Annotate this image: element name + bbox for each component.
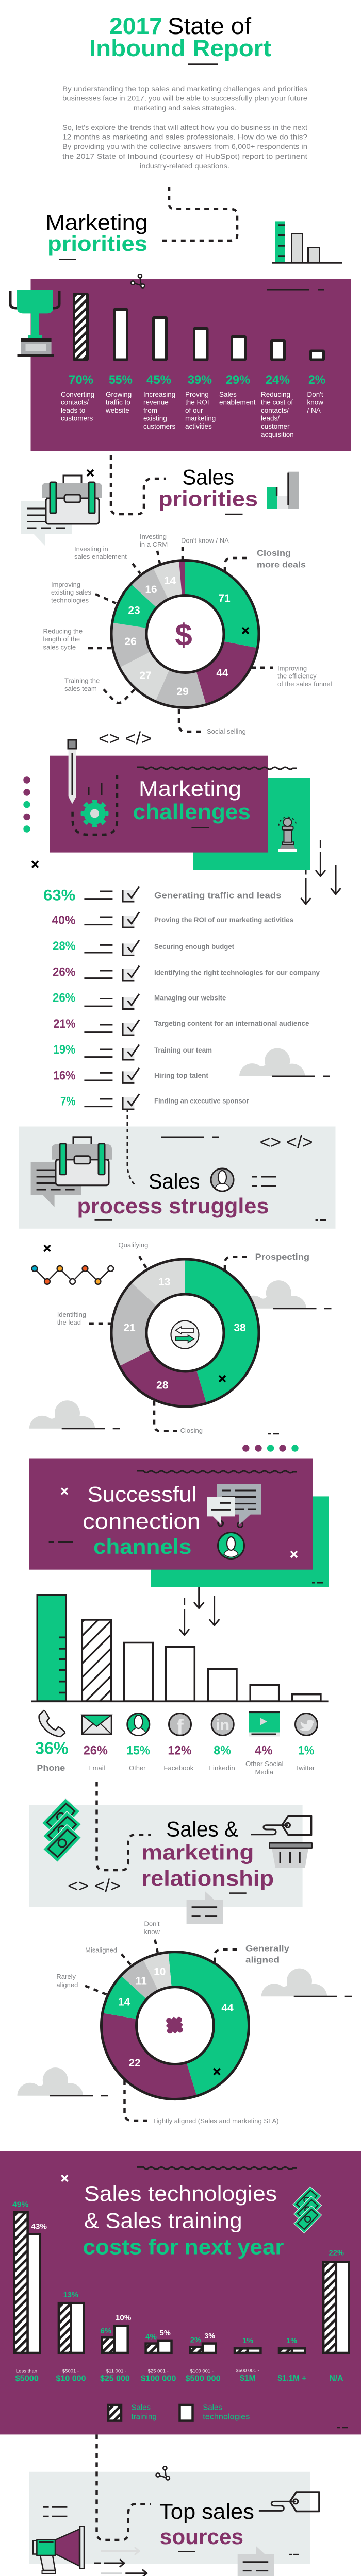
channel values and labels: Phone bbox=[37, 1763, 65, 1773]
donut chart: alignment: 11 bbox=[136, 1975, 147, 1987]
heading: top sales sources: Top sales bbox=[159, 2499, 254, 2523]
intro text: the 2017 State of Inbound (courtesy of HubSpot) report to pertinent bbox=[62, 152, 307, 160]
row 21%: Targeting content for an international audience bbox=[154, 1019, 309, 1027]
row 26%: Identifying the right technologies for our company bbox=[154, 969, 320, 977]
priority labels bbox=[61, 391, 323, 438]
channel values and labels: 15% bbox=[127, 1744, 150, 1758]
axis labels: $1.1M + bbox=[277, 2374, 306, 2383]
row 26% bbox=[53, 965, 320, 981]
axis labels: $5000 bbox=[15, 2375, 39, 2383]
axis labels: $10 000 bbox=[56, 2375, 86, 2383]
bars bbox=[74, 294, 324, 360]
icon: small bar chart bbox=[272, 221, 342, 263]
intro text: By understanding the top sales and marketing challenges and priorities bbox=[62, 84, 307, 93]
donut labels: alignment bbox=[56, 1920, 290, 2125]
panel: sales technologies and training costs: costs for next year bbox=[83, 2234, 284, 2259]
icon: facebook bbox=[169, 1714, 191, 1738]
priority labels: contacts/ bbox=[61, 399, 89, 406]
percent values: 55% bbox=[109, 373, 133, 387]
list: marketing challenges bbox=[43, 886, 320, 1109]
donut labels: sales priorities: Improving bbox=[51, 581, 80, 588]
percent values: 39% bbox=[188, 373, 212, 387]
priority labels: Converting bbox=[61, 391, 94, 398]
priority labels: the ROI bbox=[185, 399, 209, 406]
heading: marketing priorities: Marketing bbox=[45, 210, 148, 234]
heading: marketing priorities: priorities bbox=[47, 231, 147, 256]
axis labels: Less than bbox=[16, 2369, 37, 2375]
channel values and labels: Twitter bbox=[295, 1764, 315, 1772]
panel: top sales sources: sources bbox=[160, 2524, 243, 2549]
row 21%: 21% bbox=[54, 1017, 75, 1031]
row 16%: Hiring top talent bbox=[154, 1071, 208, 1079]
channel values and labels bbox=[35, 1738, 315, 1776]
panel: marketing challenges bbox=[50, 740, 310, 870]
donut labels: sales process: Prospecting bbox=[255, 1252, 309, 1262]
donut labels: sales priorities: technologies bbox=[51, 597, 89, 604]
row 40%: Proving the ROI of our marketing activities bbox=[154, 916, 293, 924]
bar values: 13% bbox=[63, 2291, 78, 2299]
priority labels: customers bbox=[143, 422, 176, 430]
icon: gear bbox=[73, 775, 117, 835]
title: State of bbox=[168, 13, 252, 39]
donut labels: sales priorities: Reducing the bbox=[43, 628, 83, 635]
priority labels: enablement bbox=[219, 399, 256, 406]
donut chart: sales priorities bbox=[111, 561, 259, 708]
donut labels: sales priorities: Investing bbox=[140, 533, 167, 540]
wavy line bbox=[137, 767, 297, 769]
icon: chess pawn bbox=[278, 817, 297, 852]
priority labels: / NA bbox=[307, 406, 321, 414]
channel icons bbox=[39, 1710, 318, 1738]
donut labels: alignment: know bbox=[144, 1928, 160, 1936]
row 40% bbox=[52, 912, 293, 927]
dashed connector: sales priorities bbox=[111, 455, 166, 514]
title: 2017 bbox=[109, 13, 162, 39]
panel: successful connection channels: connection bbox=[83, 1509, 201, 1533]
donut chart: sales priorities: 26 bbox=[124, 636, 137, 648]
axis labels: $1M bbox=[240, 2374, 256, 2383]
bar values: 3% bbox=[204, 2332, 215, 2341]
donut chart: alignment bbox=[101, 1952, 249, 2099]
icon: heading bars bbox=[267, 472, 299, 509]
channel values and labels: 12% bbox=[168, 1744, 191, 1758]
wavy line bbox=[137, 2167, 297, 2169]
axis labels: N/A bbox=[329, 2374, 343, 2383]
panel: sales and marketing relationship: relationship bbox=[141, 1866, 274, 1890]
icon: price tag bbox=[251, 1816, 311, 1835]
priority labels: Proving bbox=[185, 391, 209, 398]
donut chart: sales priorities: $ bbox=[175, 618, 192, 652]
donut labels: sales priorities: Improving bbox=[277, 664, 307, 672]
percent values: 45% bbox=[146, 373, 171, 387]
channel values and labels: 36% bbox=[35, 1738, 69, 1758]
row 26%: 26% bbox=[53, 965, 75, 979]
icon: briefcase with speech bubble bbox=[21, 470, 102, 546]
row 26%: Managing our website bbox=[154, 994, 226, 1002]
priority labels: of our bbox=[185, 406, 203, 414]
cloud bbox=[239, 1048, 330, 1076]
donut labels: sales priorities: the efficiency bbox=[277, 672, 317, 680]
priority labels: Sales bbox=[219, 391, 237, 398]
row 19%: Training our team bbox=[154, 1046, 212, 1054]
icon: pen bbox=[68, 740, 76, 804]
priority labels: traffic to bbox=[106, 399, 130, 406]
intro text: marketing and sales strategies. bbox=[134, 104, 236, 112]
panel: successful connection channels bbox=[29, 1458, 329, 1587]
channel values and labels: 4% bbox=[255, 1744, 273, 1758]
donut chart: alignment: 44 bbox=[221, 2002, 234, 2014]
donut chart: alignment: 14 bbox=[118, 1996, 130, 2008]
axis labels: $5001 - bbox=[62, 2369, 79, 2375]
row 19%: 19% bbox=[53, 1043, 75, 1057]
icon: email bbox=[82, 1715, 111, 1734]
axis labels bbox=[15, 2368, 343, 2383]
donut labels: alignment: aligned bbox=[245, 1955, 280, 1965]
heading: sales priorities: priorities bbox=[158, 487, 258, 511]
icon: chat bubbles bbox=[207, 1484, 261, 1527]
legend: Sales bbox=[203, 2403, 222, 2412]
donut chart: sales priorities: 44 bbox=[216, 667, 228, 679]
donut labels: alignment: Misaligned bbox=[85, 1946, 117, 1954]
donut labels: sales priorities: Don't know / NA bbox=[181, 537, 229, 544]
icon: price tag bbox=[259, 2492, 319, 2511]
legend: training bbox=[131, 2413, 157, 2421]
bar values: 1% bbox=[286, 2336, 297, 2345]
icon: megaphone bbox=[33, 2527, 84, 2573]
donut labels: sales priorities: sales team bbox=[64, 685, 97, 692]
donut chart: sales priorities: 16 bbox=[145, 584, 157, 596]
donut labels: alignment: Don't bbox=[144, 1920, 160, 1928]
donut labels: sales process bbox=[57, 1241, 309, 1434]
donut labels: alignment: Rarely bbox=[56, 1973, 76, 1980]
priority labels: revenue bbox=[143, 399, 169, 406]
donut labels: sales priorities: Social selling bbox=[207, 727, 246, 735]
donut labels: sales priorities: length of the bbox=[43, 635, 80, 643]
panel: marketing challenges: challenges bbox=[133, 800, 251, 824]
axis labels: $25 001 - bbox=[148, 2369, 169, 2375]
row 63%: Generating traffic and leads bbox=[154, 890, 282, 900]
speech bubble bbox=[187, 1891, 223, 1924]
priority labels: customer bbox=[261, 422, 290, 430]
heading: sales priorities: Sales bbox=[183, 465, 234, 489]
channel values and labels: Other bbox=[129, 1764, 146, 1772]
donut chart: sales process: 13 bbox=[158, 1276, 170, 1288]
priority labels: acquisition bbox=[261, 431, 294, 438]
row 28%: 28% bbox=[53, 939, 75, 953]
percent values: 70% bbox=[69, 373, 93, 387]
donut labels: sales priorities: more deals bbox=[257, 560, 306, 569]
legend: technologies bbox=[203, 2413, 250, 2421]
intro text: 12 months as marketing and sales professionals. How do we do this? bbox=[62, 133, 307, 141]
donut labels: sales priorities: existing sales bbox=[51, 588, 92, 596]
clouds bbox=[29, 1280, 331, 1429]
donut labels: sales priorities: Investing in bbox=[74, 545, 108, 553]
axis labels: $100 001 - bbox=[190, 2369, 214, 2375]
donut labels: alignment: Tightly aligned (Sales and marketing SLA) bbox=[153, 2117, 279, 2125]
icon: linkedin: in bbox=[216, 1717, 229, 1734]
donut labels: sales priorities: Closing bbox=[257, 548, 291, 558]
axis labels: $500 001 - bbox=[236, 2368, 259, 2374]
panel: successful connection channels: channels bbox=[93, 1534, 191, 1558]
channel values and labels: Other Social bbox=[245, 1760, 284, 1768]
channel values and labels: 8% bbox=[214, 1744, 231, 1758]
channel values and labels: Media bbox=[255, 1768, 274, 1776]
priority labels: leads to bbox=[61, 406, 85, 414]
percent values: 29% bbox=[226, 373, 250, 387]
donut labels: sales priorities: sales enablement bbox=[74, 553, 127, 561]
clouds bbox=[18, 1969, 352, 2096]
intro text: By providing you with the collective answers from 6,000+ respondents in bbox=[62, 142, 307, 150]
row 40%: 40% bbox=[52, 913, 75, 927]
donut labels: sales priorities: in a CRM bbox=[140, 540, 168, 548]
code symbol bbox=[99, 728, 152, 749]
intro text bbox=[62, 84, 307, 170]
percent values: 2% bbox=[308, 373, 325, 387]
priority labels: Reducing bbox=[261, 391, 290, 398]
priority labels: leads/ bbox=[261, 415, 280, 422]
icon: phone bbox=[39, 1710, 65, 1737]
down arrows bbox=[301, 840, 340, 904]
panel: top sales sources bbox=[29, 2434, 319, 2576]
code symbol bbox=[68, 1876, 121, 1896]
donut chart: sales process: 28 bbox=[156, 1380, 169, 1391]
row 26%: 26% bbox=[53, 991, 75, 1005]
channel values and labels: Linkedin bbox=[209, 1764, 235, 1772]
axis labels: $100 000 bbox=[141, 2375, 176, 2383]
panel: sales and marketing relationship: marketing bbox=[141, 1840, 254, 1865]
heading: sales technologies: Sales technologies bbox=[84, 2181, 277, 2206]
channel values and labels: 26% bbox=[84, 1744, 108, 1758]
donut chart: sales priorities: 27 bbox=[139, 670, 152, 682]
icon: exchange arrows bbox=[171, 1321, 199, 1349]
donut labels: sales process: Closing bbox=[180, 1427, 203, 1434]
icon: briefcase bbox=[31, 1137, 112, 1207]
bar values: 4% bbox=[145, 2333, 157, 2342]
bar values: 49% bbox=[12, 2200, 28, 2209]
bar values: 10% bbox=[116, 2313, 131, 2323]
panel: sales process struggles: process struggles bbox=[77, 1194, 269, 1218]
icon: facebook: f bbox=[176, 1716, 184, 1738]
priority labels: website bbox=[105, 406, 129, 414]
donut chart: sales priorities: 29 bbox=[176, 686, 189, 698]
row 16%: 16% bbox=[53, 1069, 75, 1083]
decorative dots bbox=[23, 776, 30, 833]
priority labels: contacts/ bbox=[261, 406, 289, 414]
title: Inbound Report bbox=[89, 35, 271, 61]
donut labels: alignment: Generally bbox=[245, 1943, 290, 1954]
row 21% bbox=[54, 1017, 309, 1035]
heading: sales and marketing relationship: Sales & bbox=[166, 1817, 238, 1841]
percent values bbox=[69, 373, 325, 387]
donut chart: sales process: 21 bbox=[123, 1322, 136, 1334]
donut chart: sales process: 38 bbox=[234, 1322, 246, 1334]
bar values: 2% bbox=[190, 2336, 201, 2345]
row 16% bbox=[53, 1068, 208, 1083]
donut chart: alignment: 10 bbox=[154, 1966, 166, 1978]
icon: video bbox=[249, 1711, 280, 1736]
x mark bbox=[32, 861, 38, 868]
donut labels: sales priorities: of the sales funnel bbox=[277, 680, 332, 688]
zigzag line bbox=[32, 1245, 113, 1284]
dashed connector: marketing priorities bbox=[161, 187, 237, 241]
channel values and labels: Email bbox=[88, 1764, 105, 1772]
channel values and labels: 1% bbox=[298, 1744, 314, 1758]
priority labels: customers bbox=[61, 415, 93, 422]
icon: twitter bbox=[295, 1714, 318, 1735]
priority labels: Don't bbox=[307, 391, 323, 398]
donut labels: sales priorities bbox=[43, 533, 332, 735]
panel: sales process struggles bbox=[19, 1109, 335, 1229]
panel: sales and marketing relationship bbox=[29, 1782, 312, 1924]
row 19% bbox=[53, 1043, 212, 1060]
icon: trophy bbox=[10, 290, 59, 357]
legend: Sales bbox=[131, 2403, 151, 2412]
grouped bar chart bbox=[14, 2212, 349, 2353]
priority labels: Increasing bbox=[143, 391, 175, 398]
donut chart: sales priorities: 14 bbox=[164, 575, 176, 587]
icon: money bbox=[42, 1799, 81, 1862]
priority labels: Growing bbox=[106, 391, 132, 398]
icon: money bbox=[293, 2187, 322, 2233]
bar values: 22% bbox=[329, 2249, 344, 2258]
icon: share nodes bbox=[131, 274, 144, 288]
bar values: 6% bbox=[101, 2327, 111, 2335]
donut chart: sales priorities: 23 bbox=[128, 605, 140, 616]
code symbol bbox=[260, 1132, 313, 1153]
axis labels: $500 000 bbox=[185, 2375, 221, 2383]
icon: puzzle piece bbox=[160, 2011, 189, 2039]
icon: share nodes bbox=[156, 2466, 170, 2480]
title bbox=[89, 13, 271, 65]
speech bubble bbox=[238, 2546, 274, 2576]
down arrows bbox=[179, 1587, 219, 1635]
row 63%: 63% bbox=[43, 887, 75, 904]
row 26% bbox=[53, 991, 226, 1009]
row 28% bbox=[53, 939, 234, 955]
priority labels: know bbox=[307, 399, 323, 406]
priority labels: the cost of bbox=[261, 399, 293, 406]
row 28%: Securing enough budget bbox=[154, 942, 234, 951]
intro text: So, let's explore the trends that will affect how you do business in the next bbox=[62, 123, 307, 131]
bar chart: connection channels bbox=[31, 1595, 329, 1701]
heading: successful connection channels: Successful bbox=[88, 1482, 196, 1506]
heading: sales process struggles: Sales bbox=[149, 1169, 200, 1193]
donut chart: sales process bbox=[111, 1259, 259, 1406]
priority labels: existing bbox=[143, 415, 167, 422]
bar values: 1% bbox=[242, 2336, 253, 2345]
row 7%: 7% bbox=[60, 1095, 75, 1109]
priority labels: from bbox=[143, 406, 157, 414]
legend bbox=[108, 2403, 250, 2421]
donut labels: sales process: Identifting bbox=[57, 1311, 86, 1318]
percent values: 24% bbox=[266, 373, 290, 387]
donut chart: sales priorities: 71 bbox=[218, 592, 231, 604]
row 7% bbox=[60, 1094, 249, 1109]
donut labels: sales process: the lead bbox=[57, 1318, 81, 1326]
icon: profile bbox=[211, 1168, 234, 1191]
intro text: industry-related questions. bbox=[140, 162, 229, 170]
donut chart: alignment: 22 bbox=[128, 2057, 141, 2069]
decorative dots bbox=[242, 1445, 299, 1452]
right arrows bbox=[94, 2547, 147, 2576]
heading: sales priorities bbox=[158, 465, 258, 515]
donut labels: alignment: aligned bbox=[56, 1981, 78, 1989]
bar values bbox=[12, 2200, 344, 2345]
bar values: 5% bbox=[160, 2329, 171, 2337]
icon: linkedin bbox=[211, 1714, 234, 1735]
heading: marketing challenges: Marketing bbox=[139, 776, 241, 801]
row 7%: Finding an executive sponsor bbox=[154, 1096, 249, 1105]
intro text: businesses face in 2017, you will be able to successfully plan your future bbox=[62, 94, 307, 103]
icon: other profile bbox=[127, 1714, 150, 1735]
heading: marketing priorities bbox=[45, 210, 148, 260]
icon: bin bbox=[269, 1843, 312, 1868]
priority labels: activities bbox=[185, 422, 212, 430]
icon: profile bbox=[218, 1532, 244, 1559]
axis labels: $25 000 bbox=[100, 2375, 130, 2383]
axis labels: $11 001 - bbox=[106, 2369, 126, 2375]
panel: sales technologies and training costs: & Sales training bbox=[84, 2208, 242, 2232]
donut labels: sales priorities: Training the bbox=[64, 677, 100, 684]
panel: marketing priorities bbox=[31, 274, 351, 451]
bar values: 43% bbox=[31, 2222, 47, 2231]
donut labels: sales process: Qualifying bbox=[119, 1241, 148, 1249]
donut labels: sales priorities: sales cycle bbox=[43, 643, 76, 651]
row 63% bbox=[43, 886, 282, 904]
priority labels: marketing bbox=[185, 415, 216, 422]
wavy line bbox=[137, 1471, 297, 1473]
panel: sales technologies and training costs bbox=[0, 2151, 361, 2434]
channel values and labels: Facebook bbox=[163, 1764, 194, 1772]
